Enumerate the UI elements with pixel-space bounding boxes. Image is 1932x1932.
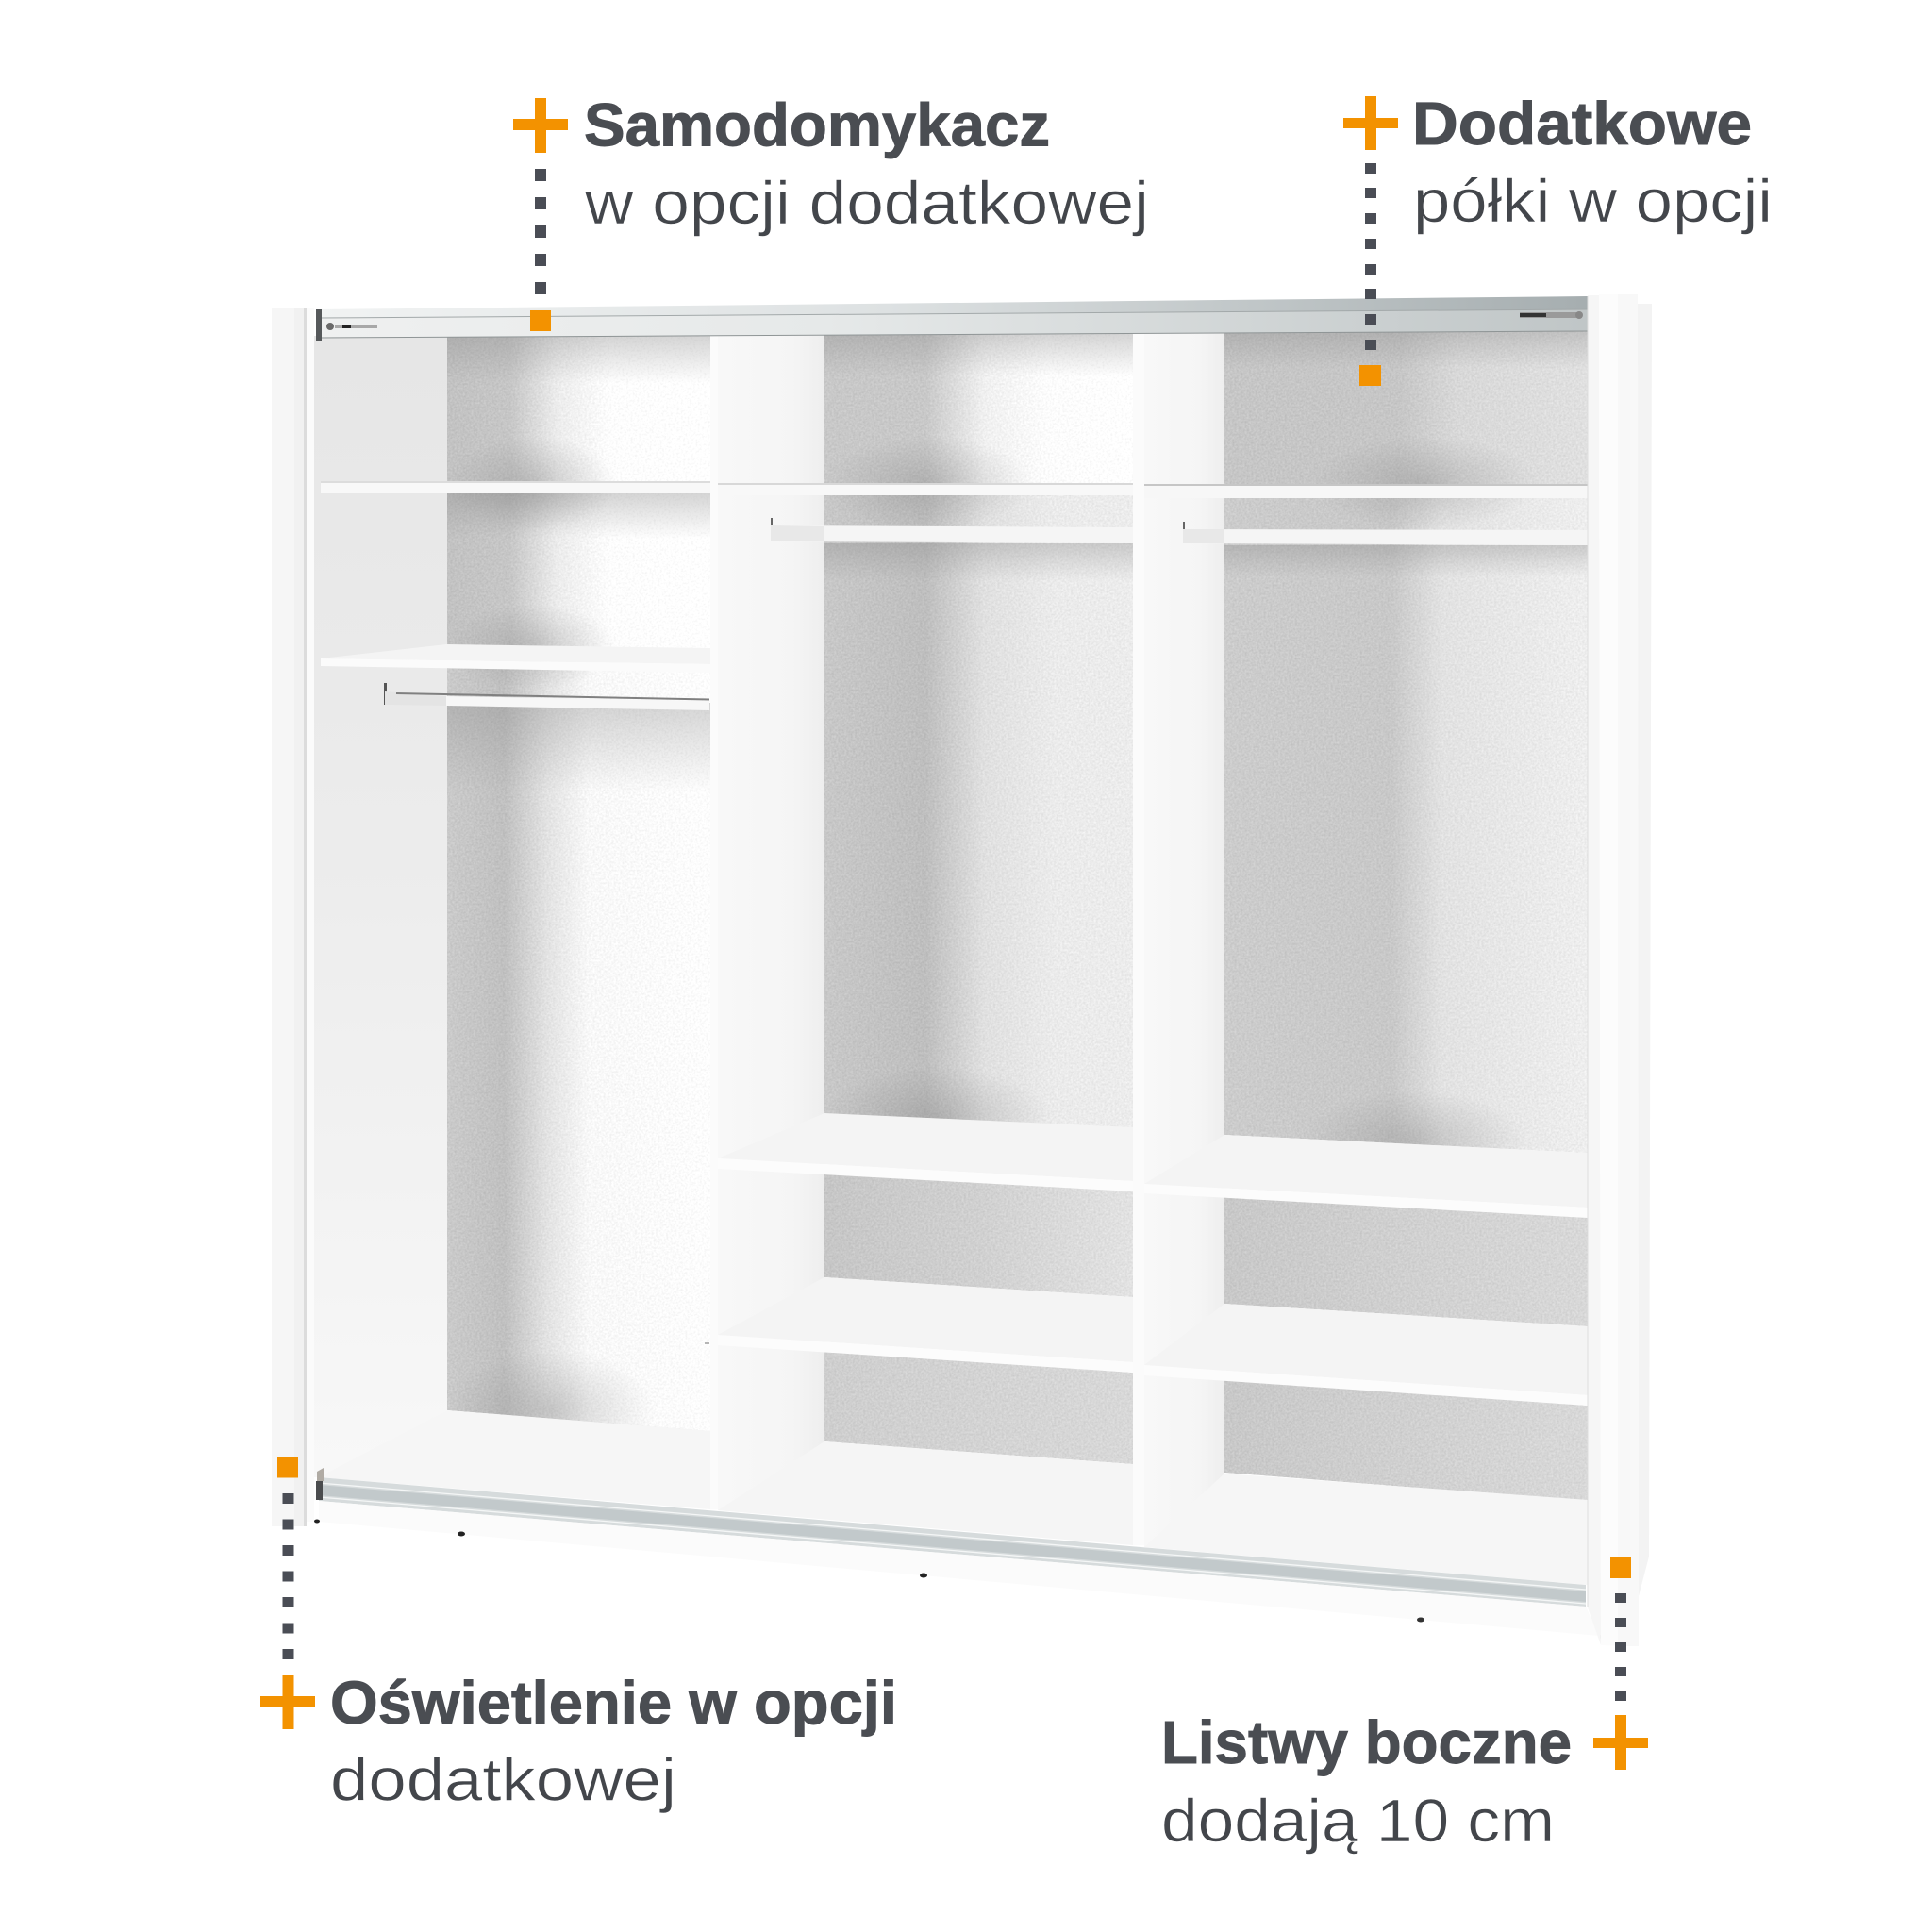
text block [330, 1669, 897, 1813]
callout: Oświetlenie [260, 1457, 897, 1813]
dotted leader [1365, 163, 1376, 350]
marker square [530, 310, 551, 331]
icon: plus [1343, 96, 1398, 150]
icon: plus [1593, 1715, 1648, 1770]
shelves column 1 [321, 481, 710, 673]
right side strip [1588, 294, 1652, 1646]
marker square [1610, 1557, 1631, 1578]
bottom sliding rail [316, 1468, 1586, 1607]
back panels with linen texture [447, 331, 1588, 1501]
text block: dodatkowej [330, 1745, 676, 1813]
panel shading [447, 331, 1588, 1472]
top sliding rail [316, 296, 1588, 341]
text block: Dodatkowe [1412, 90, 1752, 158]
floor panels [319, 1410, 1588, 1585]
dotted leader [535, 169, 546, 294]
text block [1161, 1708, 1572, 1855]
vertical dividers [705, 333, 1144, 1545]
marker square [277, 1457, 298, 1477]
wardrobe illustration [272, 294, 1652, 1646]
shelves column 2 [718, 483, 1133, 1373]
icon: plus [260, 1675, 315, 1729]
dotted leader [1615, 1593, 1626, 1701]
text block [1412, 90, 1773, 235]
text block: półki w opcji [1413, 167, 1773, 235]
text block: w opcji dodatkowej [584, 169, 1149, 237]
text block: dodają 10 cm [1161, 1787, 1555, 1855]
text block: Listwy boczne [1161, 1708, 1572, 1776]
callout: Samodomykacz [513, 92, 1149, 331]
hanging rods [384, 518, 1588, 710]
left side strip [272, 308, 314, 1526]
callout: Dodatkowe [1343, 90, 1773, 386]
marker square [1359, 365, 1381, 386]
text block: Samodomykacz [584, 92, 1050, 159]
plinth and feet [314, 1501, 1605, 1639]
text block: Oświetlenie w opcji [330, 1669, 897, 1737]
text block [584, 92, 1149, 237]
side walls [314, 333, 1224, 1547]
icon: plus [513, 98, 568, 153]
callout: Listwy boczne [1161, 1557, 1648, 1855]
dotted leader [283, 1493, 294, 1659]
shelves column 3 [1144, 484, 1588, 1406]
